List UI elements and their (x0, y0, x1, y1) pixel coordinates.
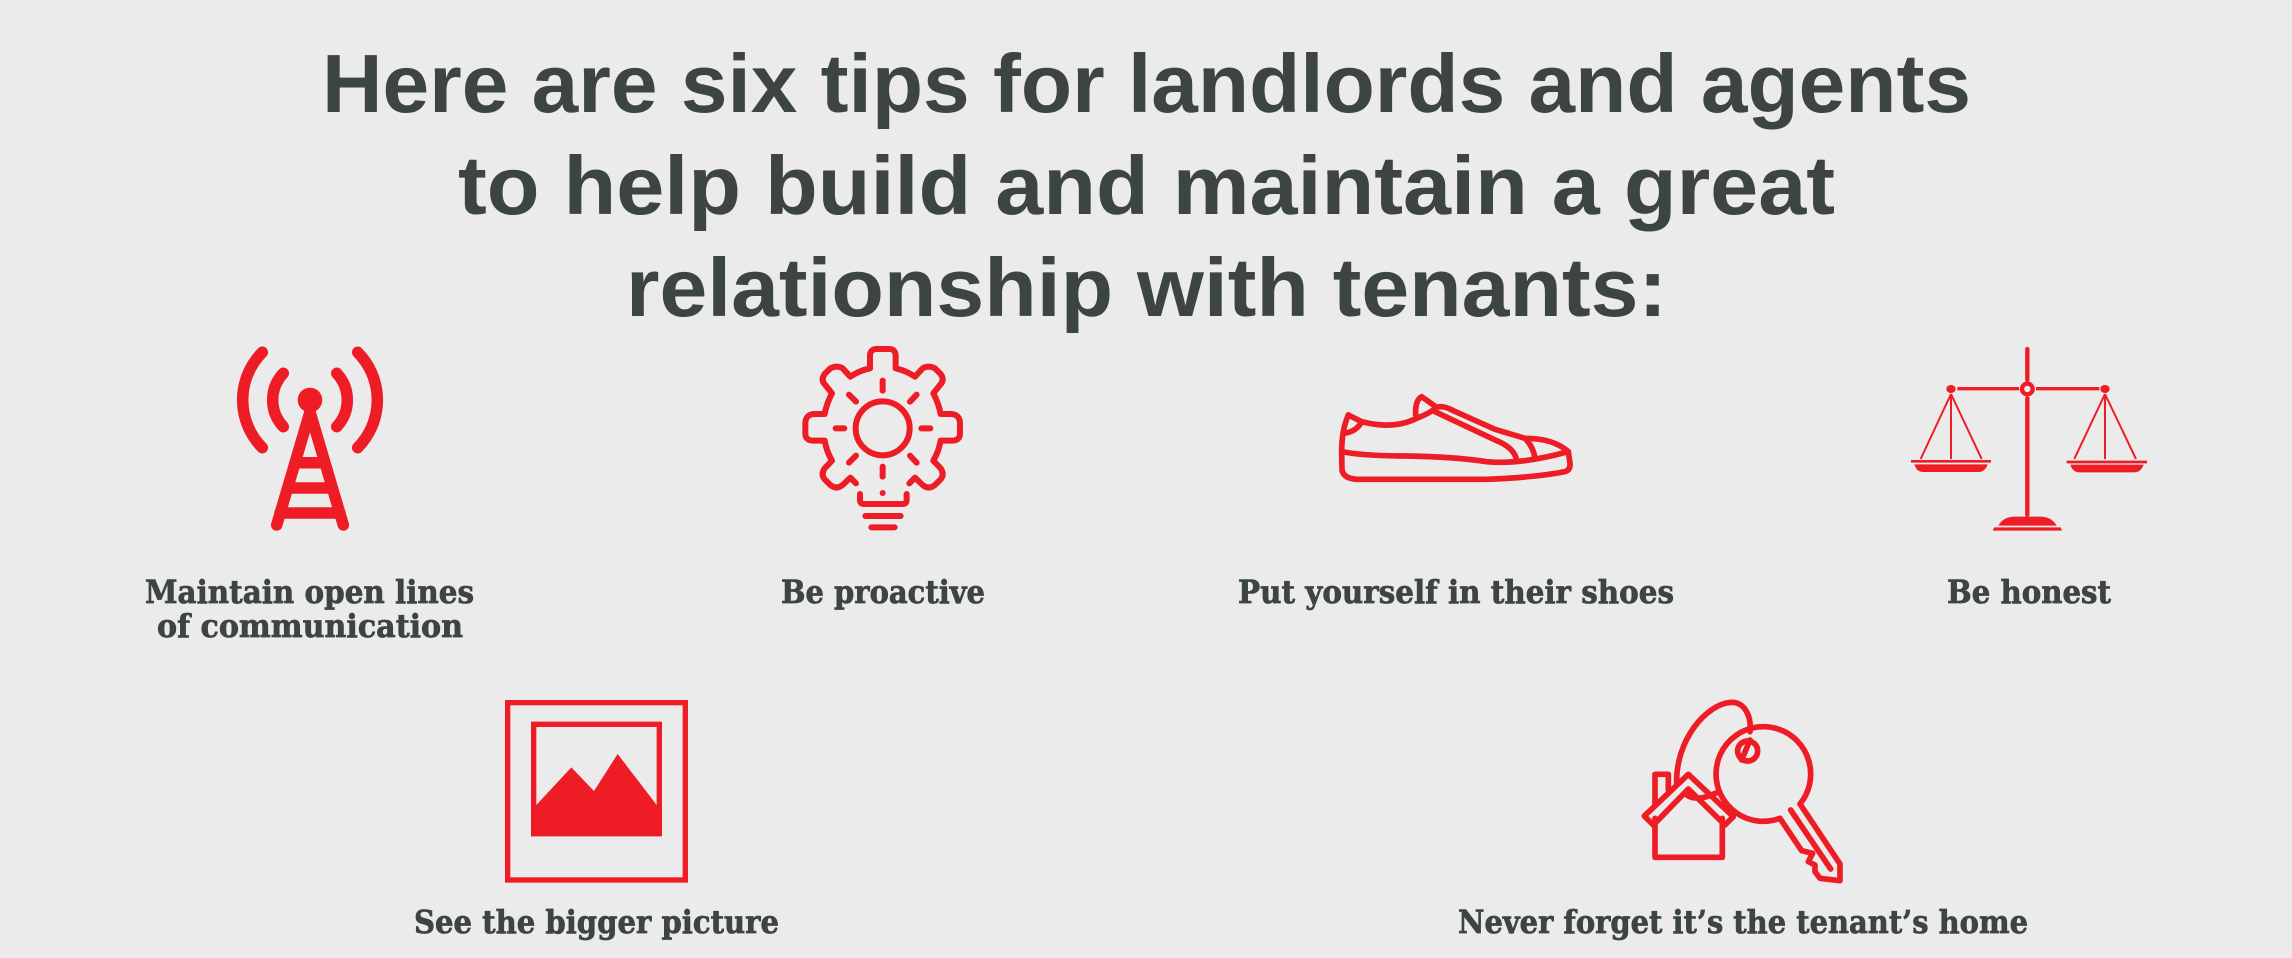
icon: framed picture (508, 703, 685, 880)
panel: tip 1 communication (145, 352, 474, 645)
panel: tip 6 never forget it's the tenant's home (1458, 702, 2028, 941)
title (322, 37, 1971, 334)
label: see the bigger picture: See the bigger picture (414, 903, 779, 941)
panel: tip 4 be honest (1911, 349, 2147, 611)
label: be proactive: Be proactive (781, 573, 985, 611)
icon: shoe (1342, 397, 1570, 479)
title: relationship with tenants: (626, 241, 1667, 334)
panel: tip 2 be proactive (781, 349, 985, 611)
icon: gear light bulb (805, 349, 960, 527)
label: put yourself in their shoes: Put yourself in their shoes (1238, 573, 1674, 611)
title: to help build and maintain a great (458, 139, 1835, 232)
panel: tip 5 see the bigger picture (414, 703, 779, 941)
icon: house keyring and key (1644, 702, 1840, 881)
label: maintain open lines of communication: Maintain open lines (145, 573, 474, 611)
panel: tip 3 put yourself in their shoes (1238, 397, 1674, 611)
label: maintain open lines of communication: of communication (157, 607, 463, 645)
label: maintain open lines of communication (145, 573, 474, 645)
title: Here are six tips for landlords and agents (322, 37, 1971, 130)
icon: radio tower (243, 352, 377, 525)
label: be honest: Be honest (1947, 573, 2111, 611)
label: never forget it's the tenant's home: Never forget it’s the tenant’s home (1458, 903, 2028, 941)
icon: balance scales (1911, 349, 2147, 531)
